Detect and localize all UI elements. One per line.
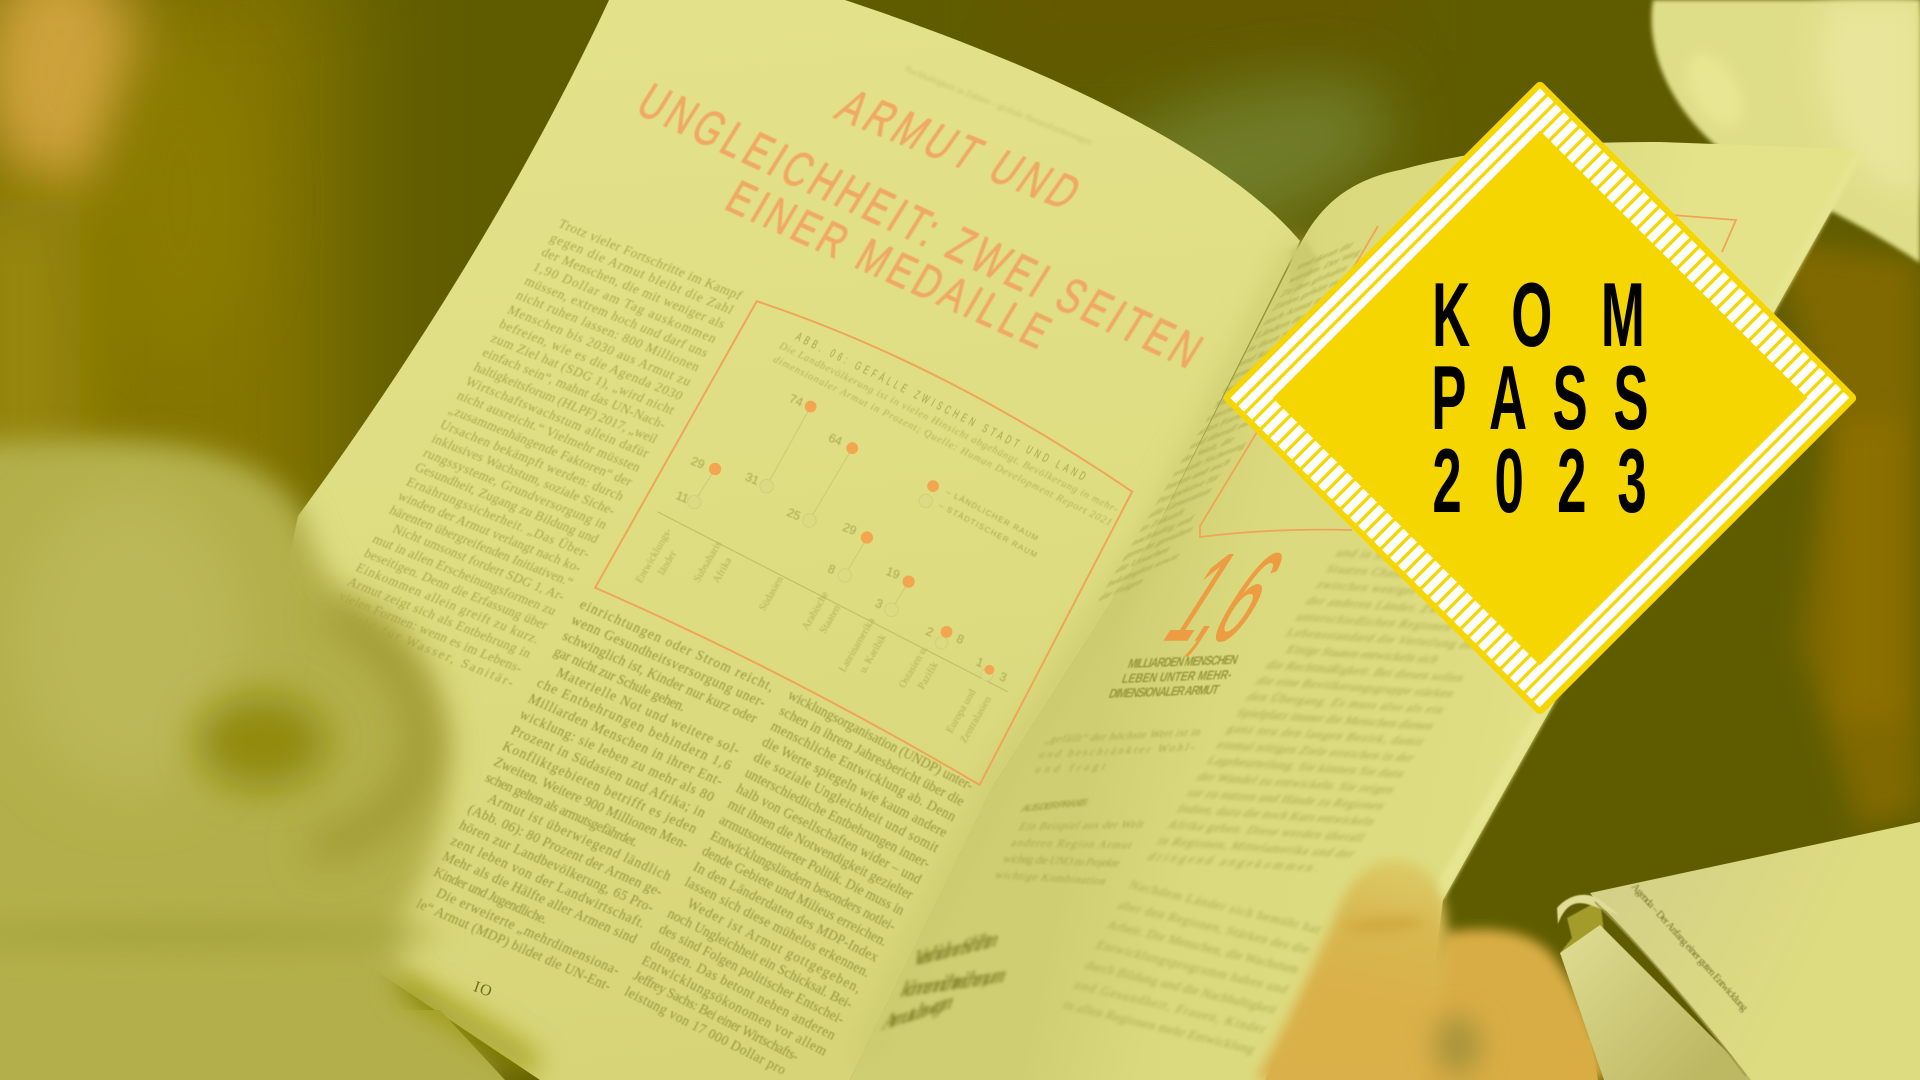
callout caption: LEBEN UNTER MEHR- (1120, 667, 1234, 686)
category labels: Pazifik (916, 660, 941, 692)
axis line (658, 512, 1008, 692)
right page: main text column: in Regionen, Mittelamerika und der (1155, 833, 1359, 860)
body text column 2: wenn Gesundheitsversorgung uner- (568, 612, 769, 711)
right page: gutter text column: gemeinsam zu (1228, 348, 1293, 383)
body text column 2: Kinder und Jugendliche. (430, 864, 551, 928)
category labels: Zentralasien (958, 694, 994, 745)
right page: gutter text column: Ländern der Welt (1253, 302, 1331, 342)
body text column 3: Jeffrey Sachs: Bei einer Wirtschafts- (630, 968, 802, 1065)
right page: gutter text column: in ihren Städten (1245, 318, 1316, 355)
lollipop connectors (694, 407, 909, 610)
right page: side notes: und fragt (1033, 760, 1109, 776)
body text column 2: hören zur Landbevölkerung, 65 Pro- (456, 817, 657, 916)
callout caption: DIMENSIONALER ARMUT (1107, 682, 1222, 701)
right page: pull quote (879, 925, 1010, 1036)
right page: main text column: einmal nötigen Ziele erreichen in der (1214, 737, 1418, 764)
right page: side notes: AUS DER PRAXIS (1019, 797, 1090, 815)
body text column 3: Weder ist Armut gottgegeben, (684, 895, 864, 997)
body text column 1: Ernährungssicherheit. „Das Über- (404, 474, 593, 561)
body text column 3: noch Ungleichheit ein Schicksal. Bei- (664, 905, 856, 1013)
right page: main text column: Afrika geben. Diese werden überall (1165, 817, 1368, 844)
body text column 1: der Menschen, die mit weniger als (539, 245, 728, 331)
right page: chart frame fragment (1200, 200, 1736, 537)
right page: main text column: die Rechtmäßigkeit. Bei diesen sollen (1264, 657, 1468, 684)
body text column 1: gegen die Armut bleibt die Zahl (547, 230, 737, 317)
right page: main text column (1145, 545, 1537, 876)
right page: pull quote: Armut zu bewegen (879, 987, 957, 1036)
body text column 2: Mehr als die Hälfte aller Armen sind (439, 848, 640, 947)
right page: gutter text column: der Welt, die (1179, 434, 1237, 466)
right page: gutter text column: bekämpfen sowie (1105, 550, 1182, 590)
right page: gutter text column: werden. Der Weg (1286, 247, 1363, 286)
body text column 1: härenten übergreifenden Initiativen.“ (387, 503, 576, 589)
page heading: Armut und Ungleichheit: ARMUT UND (826, 80, 1091, 220)
page heading: Armut und Ungleichheit: UNGLEICHHEIT: ZWEI SEITEN (628, 73, 1212, 379)
right page: main text column: und in Städten der Regionen haben (1333, 545, 1532, 572)
right page: lower text column: durch Bildung und die Nachhaltigkeit (1082, 957, 1280, 1016)
category labels (634, 526, 994, 745)
body text column 1: Nicht umsonst fordert SDG 1, Ar- (390, 521, 568, 604)
body text column 3: unterschiedliche Entbehrungen inner- (742, 765, 933, 872)
right page: gutter text column: in Zukunft (1138, 506, 1188, 535)
right page: main text column: dringend angekommen. (1145, 849, 1323, 875)
body text column 3: armutsorientierter Politik. Die muss in (716, 812, 907, 919)
body text column 3: mit ihnen die Notwendigkeit gezielter (725, 796, 916, 904)
body text column 1: nicht ruhen lassen: 800 Millionen (513, 288, 703, 374)
body text column 3: leistung von 17 000 Dollar pro (622, 983, 789, 1079)
category labels: Arabische (800, 590, 831, 632)
right page: side notes: Ein Beispiel aus der Welt (1017, 818, 1147, 833)
body text column 1: umfeld für Wasser, Sanitär- (328, 603, 517, 689)
category labels: Subsaharis (692, 540, 724, 585)
body text column 2: le“ Armut (MDP) bildet die UN-Ent- (413, 896, 614, 995)
right page: side notes: „gefällt“ der höchste Wert ist in (1043, 726, 1204, 746)
body text column 1: Einkommen allein greift zu kurz. (353, 560, 543, 646)
right page: main text column: Lebensstandard die Verteilung der (1284, 625, 1483, 652)
right page: gutter text column: nachhaltig und (1129, 513, 1196, 549)
right page: main text column: zwischen weniger Ressourcen und (1313, 577, 1512, 604)
body text column 3: die soziale Ungleichheit und somit (750, 749, 942, 857)
body text column 2: Prozent in Südasien und Afrika; in (508, 722, 709, 821)
right page: gutter text column: auch Armut zu (1261, 293, 1328, 328)
right page: gutter text column (1096, 232, 1373, 604)
legend: – LÄNDLICHER RAUM (944, 487, 1041, 543)
right page: lower text column: Entwicklungsprogramm haben und (1093, 937, 1292, 996)
body text column 2: schen gelten als armutsgefährdet. (482, 770, 641, 851)
body text column 2: einrichtungen oder Strom reicht, (577, 596, 777, 695)
body text column 2: gar nicht zur Schule gehen. (551, 643, 689, 715)
right page: main text column: Einige Staaten entwickeln sich (1284, 642, 1443, 666)
right page: gutter text column: Zu den globalen (1278, 262, 1350, 300)
right page: gutter text column: bieten und auch (1162, 456, 1233, 493)
body text column 3: dende Gebiete und Milieus erreichen. (699, 843, 890, 950)
body text column 2: zent leben von der Landwirtschaft. (448, 833, 648, 932)
right page: main text column: der anderen Länder. Zwischen den (1304, 593, 1502, 620)
right page: side notes (993, 726, 1204, 887)
right page: main text column: den Übergang. Es muss also als ein (1244, 689, 1448, 716)
right page: gutter text column: Menschen zu (1212, 378, 1272, 411)
callout caption (1107, 652, 1240, 701)
body text column 1: müssen, extrem hoch und darf uns (522, 273, 711, 360)
body text column 1: Menschen bis 2030 aus Armut zu (505, 302, 695, 389)
right page: main text column: der Wandel zu entwickeln. Sie zeigen (1194, 769, 1398, 796)
urban markers (688, 479, 993, 681)
right page: gutter text column: alle Generation (1146, 485, 1215, 521)
chart frame (595, 301, 1132, 785)
rural markers (709, 401, 994, 675)
data values: 64 (826, 431, 844, 449)
right page: lower text column: Arbeit. Die Menschen, die Wachstum (1104, 917, 1302, 976)
body text column 1: Trotz vieler Fortschritte im Kampf (556, 216, 746, 303)
body text column 2: Die erweiterte „mehrdimensiona- (433, 885, 623, 979)
right page: lower text column: in allen Regionen mehr Entwicklung (1060, 997, 1259, 1056)
body text column 1: rungssysteme, Grundversorgung in (421, 445, 610, 532)
data values: 8 (826, 562, 838, 577)
right page: lower text column: Nachdem Länder sich bemüht hat (1126, 877, 1324, 936)
body text column 3: lassen sich diese mühelos erkennen. (682, 874, 873, 981)
right page: gutter text column: soziale Sicherung (1171, 439, 1249, 480)
body text column 3: dungen. Das betont neben anderen (647, 936, 839, 1044)
right page: lower text column: und Gesundheit, Frauen, Kinder (1071, 977, 1270, 1037)
body text column 3 (622, 687, 976, 1080)
body text column 1: befreien, wie es die Agenda 2030 (497, 316, 686, 403)
chart subtitle: dimensionaler Armut in Prozent; Quelle: Human Development Report 2021 (771, 354, 1113, 529)
body text column 2: Armut ist überwiegend ländlich (485, 790, 674, 884)
body text column 3: die Werte spiegeln wie kaum andere (759, 734, 950, 841)
body text column 3: Entwicklungsökonomen vor allem (639, 952, 830, 1059)
right page: main text column: ganz neu den langen Bezirk, damit (1224, 721, 1428, 748)
legend: – STÄDTISCHER RAUM (937, 501, 1040, 560)
body text column 1: haltigkeitsforum (HLPF) 2017, „weil (471, 359, 661, 446)
body text column 1: „zusammenhängende Faktoren“ der (446, 402, 636, 489)
badge wordmark: KOM (1432, 264, 1645, 366)
page number: IO (471, 978, 495, 1001)
page heading: Armut und Ungleichheit: EINER MEDAILLE (717, 171, 1060, 358)
chart panel: urban rural gap (595, 301, 1132, 785)
data values: 1 (974, 655, 986, 670)
body text column 2: wicklung: sie leben zu mehr als 80 (516, 707, 717, 806)
plate and butter top right (1652, 0, 1920, 263)
big number callout 1,6: 1,6 (1143, 528, 1307, 667)
body text column 1: winden der Armut verlangt nach ko- (395, 488, 585, 575)
data values: 74 (787, 391, 805, 409)
body text column 3: des sind Folgen politischer Entschei- (656, 921, 847, 1028)
right page: main text column: Lagebeurteilung. Sie können Sie dazu (1204, 753, 1408, 780)
body text column 3: Entwicklungsländern besonders notlei- (707, 827, 899, 935)
body text column 2: Milliarden Menschen in ihrer Ent- (525, 691, 726, 790)
body text column 1: zum Ziel hat (SDG 1), „wird nicht (488, 331, 678, 417)
body text column 1: 1,90 Dollar am Tag auskommen (530, 259, 720, 346)
category labels: Ostasien u. (897, 644, 930, 690)
data values: 8 (955, 631, 966, 647)
body text column 3: In den Länderdaten des MDP-Index (690, 858, 882, 966)
chart subtitle: Die Landbevölkerung ist in vielen Hinsicht abgehängt. Bevölkerung in mehr- (777, 340, 1120, 516)
body text column 3: menschliche Entwicklung ab. Denn (768, 718, 959, 825)
category labels: Lateinamerika (837, 616, 878, 674)
data values: 29 (841, 520, 859, 538)
right page: main text column: sie zu nutzen und Hände zu Regionen (1184, 785, 1388, 812)
open book: right page (850, 142, 1861, 1080)
right page: gutter text column: und daran die (1294, 239, 1356, 273)
body text column 2: Materielle Not und weitere sol- (553, 664, 743, 758)
right page: gutter text column: unterstützen in (1204, 389, 1270, 424)
background: blurred shapes top left (0, 0, 340, 620)
body text column 3: wicklungsorganisation (UNDP) unter- (785, 687, 976, 794)
body text column 3: schen in ihrem Jahresbericht über die (776, 702, 967, 810)
category labels: Afrika (711, 556, 735, 585)
right page: main text column: Spielplatz immer die Menschen dienen (1234, 705, 1438, 732)
right page: gutter text column: Perspektive für (1154, 471, 1222, 507)
data values: 29 (689, 454, 707, 472)
right page: gutter text column: allen Formen (1195, 405, 1256, 438)
right page: gutter text column: die Folgen (1096, 575, 1146, 604)
data values: 3 (997, 669, 1009, 685)
chart title: ABB. 06: GEFÄLLE ZWISCHEN STADT UND LAND (793, 330, 1088, 484)
body text column 2: che Entbehrungen behindern 1,6 (534, 675, 734, 774)
book gutter shadow (862, 238, 1320, 1060)
badge wordmark: PASS (1431, 347, 1649, 449)
right page: lower text column: aber den Regionen, Stärken des die (1115, 897, 1313, 956)
hand holding book (1255, 860, 1606, 1080)
background: olive patch behind book (1000, 0, 1413, 284)
category labels: u. Karibik (858, 632, 889, 675)
body text column 1: vielen Formen: wenn es im Lebens- (336, 588, 526, 675)
badge wordmark (1431, 264, 1649, 532)
right page: gutter text column: die Ursachen (1113, 544, 1173, 576)
right page: side notes: wichtig die UNO zu Projekte (1001, 853, 1123, 869)
background: wood surface right (1770, 240, 1920, 830)
right page: side notes: wichtige Kombination (993, 869, 1109, 887)
right page: side notes: anderen Region Armut (1009, 837, 1135, 851)
category labels: länder (656, 549, 679, 577)
body text column 1: Wirtschaftswachstum allein dafür (463, 374, 653, 460)
body text column 1: inklusives Wachstum, soziale Siche- (429, 431, 618, 518)
body text column 2 (413, 596, 778, 995)
category labels: Staaten (818, 603, 843, 636)
data values: 25 (785, 505, 803, 523)
body text column 2: Konfliktgebieten betrifft es jeden (499, 738, 700, 837)
running header: Nachhaltigkeit in Zahlen – globale Herausforderungen (903, 64, 1094, 147)
booklet running header: Agenda – Der Anfang einer guten Entwicklung (1629, 882, 1750, 1014)
right page: gutter text column: und Regionen (1237, 335, 1300, 369)
open book: left page (280, 0, 1300, 1080)
badge: Kompass 2023 diamond (1222, 80, 1858, 716)
callout caption: MILLIARDEN MENSCHEN (1126, 652, 1240, 671)
category labels: Entwicklungs- (634, 526, 675, 585)
second booklet bottom right (1557, 822, 1920, 1080)
body text column 2: (Abb. 06): 80 Prozent der Armen ge- (465, 801, 666, 900)
body text column 1: Armut zeigt sich als Entbehrung in (345, 574, 534, 661)
body text column 2: Zweiten. Weitere 900 Millionen Men- (491, 754, 692, 853)
body text column 1: mut in allen Erscheinungsformen zu (370, 531, 560, 618)
right page: gutter text column: gerecht gestalten (1121, 524, 1196, 562)
category labels: Europa und (945, 687, 979, 735)
body text column 1: einfach sein“, mahnt das UN-Nach- (480, 345, 669, 432)
right page: lower text column (1060, 877, 1325, 1057)
right page: side notes: und beschränkter Wohl- (1037, 741, 1198, 761)
right page: pull quote: können nicht reichen, um (898, 961, 1010, 1002)
data values (674, 391, 1009, 685)
body text column 1: Ursachen bekämpft werden: durch (437, 417, 627, 503)
body text column 3: halb von Gesellschaften wider – und (733, 780, 924, 888)
data values: 31 (743, 470, 761, 488)
category labels: Südasien (757, 574, 786, 613)
right page: main text column: Indien, dazu die noch Kurs entwickeln (1175, 801, 1378, 828)
data values: 3 (873, 596, 885, 611)
blurred cup foreground (0, 440, 535, 1080)
data values: 11 (674, 488, 691, 506)
right page: gutter text column: Zielen gehört es (1270, 276, 1342, 314)
right page: gutter text column: beenden und die (1220, 359, 1293, 397)
right page: pull quote: Verschiedenen Schichten (910, 925, 1002, 971)
data values: 2 (924, 624, 936, 640)
data values: 19 (884, 564, 902, 582)
body text column 1: nicht ausreicht.“ Vielmehr müssten (454, 388, 644, 475)
right page: main text column: Staaten Chancen auf dem Weg zur (1323, 561, 1522, 588)
body text column 1: beseitigen. Denn die Erfassung über (362, 545, 551, 632)
body text column 1 (328, 216, 746, 690)
right page: main text column: unterschiedlichen Regionen bleibt (1294, 609, 1492, 636)
right page: main text column: die eine Bevölkerungsgruppe stärken (1254, 673, 1458, 700)
body text column 2: schwinglich ist, Kinder nur kurz oder (559, 628, 760, 727)
body text column 1: Gesundheit, Zugang zu Bildung und (412, 460, 602, 546)
right page: gutter text column: und überall auf (1187, 416, 1255, 452)
badge wordmark: 2023 (1432, 430, 1647, 532)
badge stripes (1222, 80, 1858, 716)
